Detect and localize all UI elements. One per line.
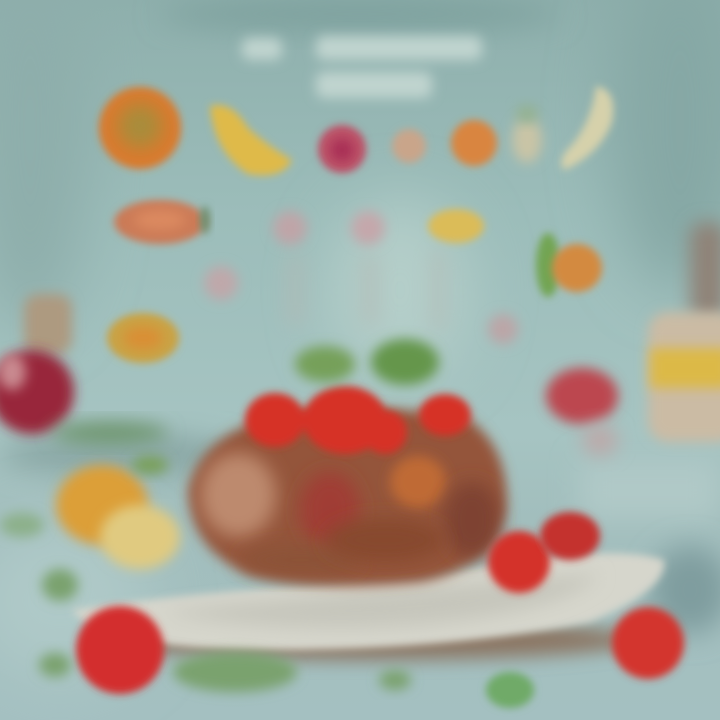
jar, right	[648, 222, 720, 442]
icon: small orange	[451, 120, 497, 166]
tomato, bottom left	[76, 606, 164, 694]
icon: orange	[99, 87, 181, 169]
tomato sauce	[245, 386, 471, 454]
icon: faded pink 2	[351, 211, 385, 245]
icon: mango	[107, 313, 179, 363]
plate	[72, 553, 664, 660]
icon: lemon	[428, 209, 484, 243]
faded lines	[285, 250, 446, 330]
icon: peach	[392, 129, 426, 163]
greens behind plate	[52, 422, 168, 444]
title (illegible in reference)	[242, 36, 482, 98]
food icons, top row	[99, 86, 613, 175]
basil leaves	[295, 339, 439, 385]
bottle neck	[24, 294, 72, 354]
tomato, bottom right	[612, 607, 684, 679]
icon: faded pink 3	[204, 266, 238, 300]
food icons, middle rows	[107, 200, 602, 363]
onion and bottle, left	[0, 294, 74, 434]
tomatoes on plate	[488, 512, 600, 593]
icon: banana	[210, 105, 292, 175]
red onion	[0, 350, 74, 434]
icon: pale vegetable	[512, 105, 542, 163]
icon: salmon slice	[114, 200, 210, 244]
meat roast	[188, 339, 506, 586]
icon: berry	[318, 125, 366, 173]
strawberry, right	[546, 368, 618, 456]
icon: faded pink 1	[273, 211, 307, 245]
icon: leafy orange	[536, 233, 602, 297]
yellow fruit, left of meat	[56, 456, 180, 569]
scattered greens	[0, 513, 534, 708]
icon: faded pink 4	[488, 314, 518, 344]
icon: pale banana	[561, 86, 613, 170]
